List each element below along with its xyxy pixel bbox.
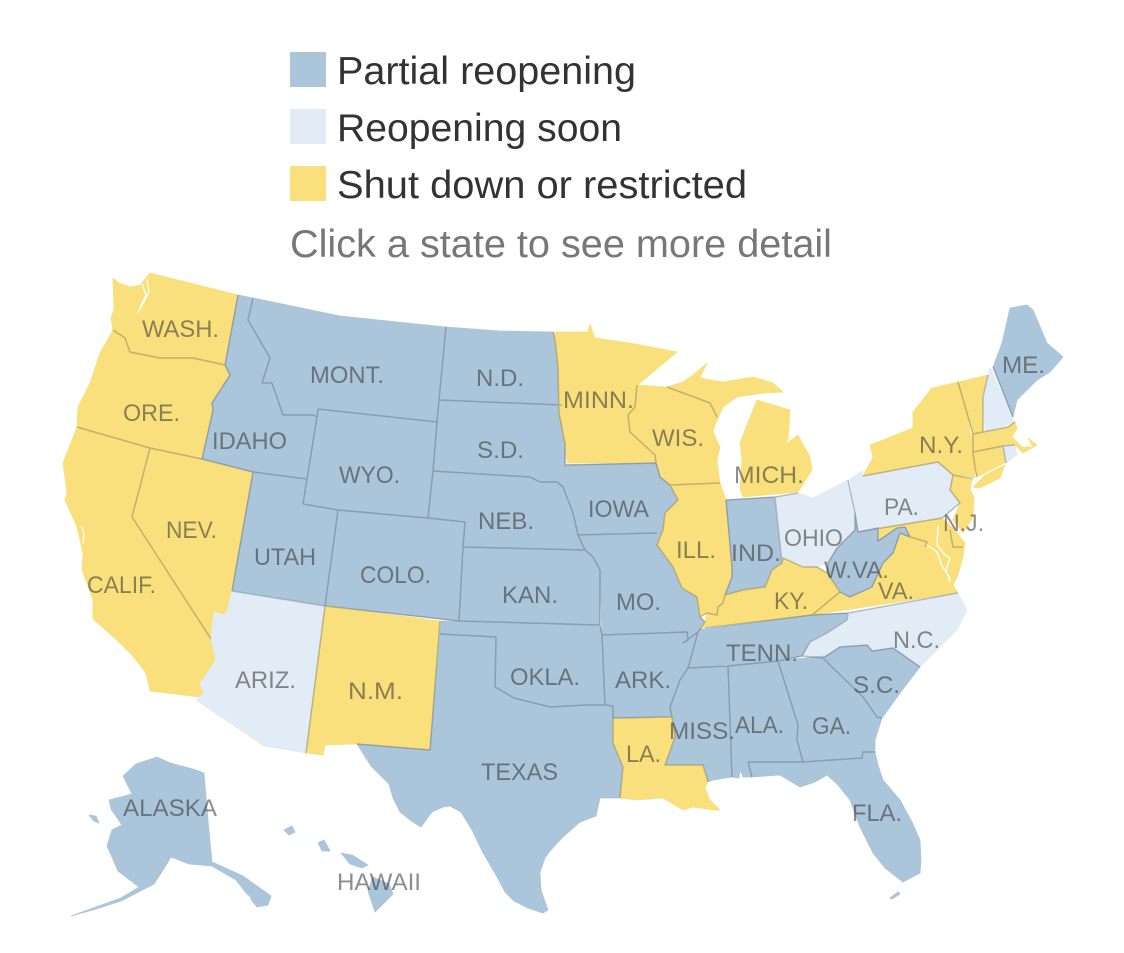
legend item: shut down or restricted: Shut down or restricted: [337, 164, 747, 207]
state: New Hampshire: [983, 367, 1013, 432]
label: TENN.: TENN.: [726, 640, 798, 667]
state: Hawaii: [284, 826, 393, 912]
label: ALASKA: ALASKA: [123, 795, 218, 822]
label: GA.: GA.: [812, 713, 851, 740]
state: Florida: [748, 752, 921, 882]
state: Long Island: [973, 465, 1005, 488]
label: WASH.: WASH.: [142, 316, 219, 343]
state: South Carolina: [823, 645, 920, 718]
state borders: [77, 295, 1015, 798]
state: Ohio: [775, 480, 855, 567]
label: ARK.: ARK.: [615, 667, 671, 694]
state: North Dakota: [439, 327, 562, 405]
label: ARIZ.: ARIZ.: [235, 667, 296, 694]
state: Tennessee: [688, 613, 848, 668]
state: Texas: [357, 634, 623, 913]
state: Michigan lower peninsula: [740, 400, 812, 497]
state: Washington: [111, 273, 238, 365]
state: Utah: [232, 472, 338, 606]
label: N.D.: N.D.: [476, 365, 524, 392]
label: W.VA.: W.VA.: [824, 557, 889, 584]
label: LA.: LA.: [626, 741, 661, 768]
label: WIS.: WIS.: [652, 425, 704, 452]
legend: [290, 50, 832, 266]
state: Massachusetts: [972, 422, 1037, 453]
label: COLO.: COLO.: [360, 562, 431, 589]
label: ILL.: ILL.: [676, 537, 716, 564]
state: New Mexico: [306, 606, 440, 755]
state: North Carolina: [803, 593, 967, 667]
label: ME.: ME.: [1002, 352, 1045, 379]
state: Missouri: [578, 530, 705, 643]
label: OHIO: OHIO: [784, 525, 843, 552]
state: Michigan upper peninsula: [667, 363, 783, 432]
state: Mississippi: [665, 666, 732, 782]
label: MO.: MO.: [616, 589, 661, 616]
state: Montana: [248, 298, 446, 422]
state labels: [87, 316, 1045, 896]
state: Arkansas: [602, 632, 698, 718]
label: TEXAS: TEXAS: [481, 759, 558, 786]
label: ORE.: ORE.: [123, 400, 180, 427]
state: Nebraska: [428, 471, 585, 550]
label: MICH.: MICH.: [734, 462, 804, 489]
state: New York: [863, 382, 975, 478]
state: Vermont: [958, 375, 988, 434]
label: MISS.: MISS.: [669, 718, 735, 745]
label: NEV.: NEV.: [166, 517, 217, 544]
state: Iowa: [563, 463, 678, 537]
label: N.C.: N.C.: [893, 627, 940, 654]
state: Nevada: [132, 448, 253, 639]
state: West Virginia: [827, 513, 910, 597]
label: S.C.: S.C.: [853, 672, 900, 699]
map of states: [63, 273, 1063, 916]
legend item: partial reopening: Partial reopening: [337, 50, 636, 93]
label: UTAH: UTAH: [254, 544, 316, 571]
state: Indiana: [725, 497, 782, 595]
label: MINN.: MINN.: [563, 387, 634, 414]
state: Wisconsin: [628, 385, 720, 485]
label: N.M.: N.M.: [348, 678, 403, 705]
label: WYO.: WYO.: [339, 462, 400, 489]
label: HAWAII: HAWAII: [337, 869, 421, 896]
legend item: reopening soon: Reopening soon: [337, 107, 622, 150]
state: Idaho: [202, 295, 317, 479]
Water cuts: Puget Sound, San Francisco Bay, Chesapeake Bay, Alaska panhandle: [82, 280, 950, 898]
state: Virginia, Maryland and Delaware: [812, 518, 965, 615]
label: NEB.: NEB.: [478, 508, 534, 535]
state: Illinois: [657, 483, 732, 617]
legend note: Click a state to see more detail: [290, 223, 832, 266]
label: OKLA.: OKLA.: [510, 664, 580, 691]
label: CALIF.: CALIF.: [87, 572, 156, 599]
state: Wyoming: [303, 409, 437, 518]
label: ALA.: ALA.: [735, 712, 784, 739]
state: South Dakota: [433, 400, 565, 487]
state: Maine: [993, 305, 1063, 417]
state: California: [63, 427, 216, 697]
state: Rhode Island: [1003, 445, 1017, 463]
label: IDAHO: IDAHO: [212, 428, 287, 455]
state: Oklahoma: [440, 621, 605, 707]
state: Pennsylvania: [850, 462, 960, 532]
label: VA.: VA.: [878, 578, 914, 605]
label: PA.: PA.: [884, 494, 919, 521]
state: Alaska: [71, 757, 271, 916]
state: Connecticut: [973, 446, 1006, 477]
state: Minnesota: [553, 324, 677, 463]
state: Louisiana: [613, 717, 720, 810]
label: MONT.: MONT.: [310, 362, 384, 389]
state: Georgia: [777, 656, 882, 762]
state: Kansas: [459, 547, 600, 625]
state: Alaska islands: [89, 815, 99, 823]
state: Alabama: [728, 661, 803, 778]
label: IOWA: IOWA: [588, 496, 650, 523]
label: KY.: KY.: [774, 588, 808, 615]
state: Oregon: [77, 330, 230, 459]
label: IND.: IND.: [731, 540, 781, 567]
state: Florida Keys: [890, 892, 900, 899]
label: S.D.: S.D.: [477, 437, 524, 464]
label: N.Y.: N.Y.: [919, 432, 963, 459]
label: KAN.: KAN.: [502, 582, 558, 609]
label: FLA.: FLA.: [852, 800, 902, 827]
state: Colorado: [325, 510, 465, 621]
state: Kentucky: [700, 558, 840, 628]
state: Arizona: [196, 591, 325, 753]
label: N.J.: N.J.: [943, 510, 984, 537]
state: New Jersey: [950, 475, 974, 533]
